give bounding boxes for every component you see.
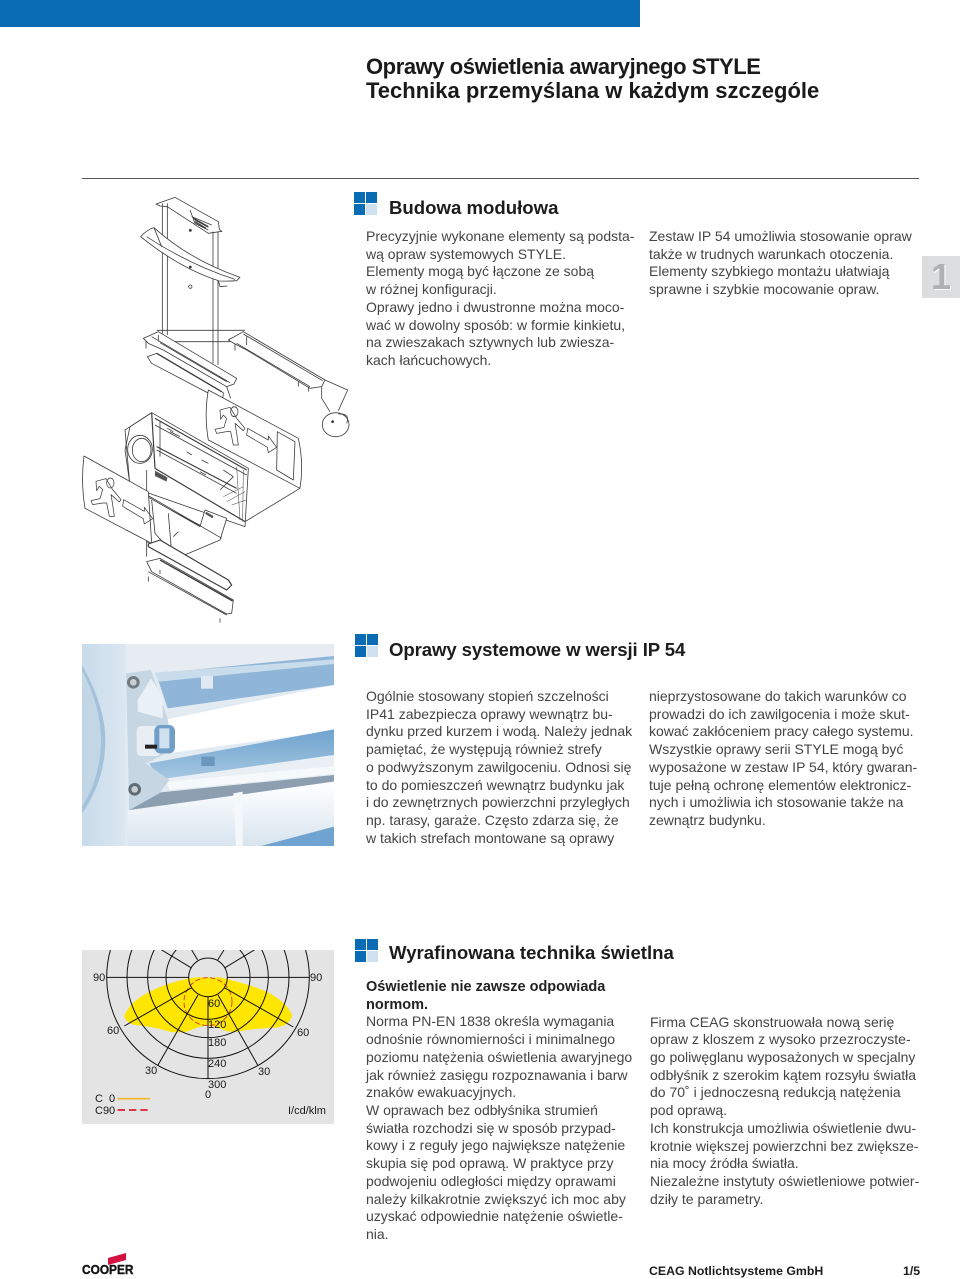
polar light distribution chart: 0: [205, 1089, 211, 1101]
text block: IP 54 right column: zewnątrz budynku.: [649, 812, 766, 828]
exploded drawing: luminaire module parts: [82, 196, 350, 623]
polar light distribution chart: 60: [107, 1025, 119, 1037]
text block: light technology right column: go poliwęglanu wyposażonych w specjalny: [650, 1049, 915, 1065]
polar light distribution chart: 30: [258, 1066, 270, 1078]
polar light distribution chart: 90: [310, 972, 322, 984]
polar light distribution chart: 90: [93, 972, 105, 984]
text block: IP 54 right column: [649, 688, 917, 828]
text block: Budowa modułowa left column: na zwieszakach sztywnych lub zwiesza-: [366, 334, 614, 350]
yellow C0 distribution: [124, 977, 292, 1032]
polar light distribution chart: 240: [208, 1058, 226, 1070]
text block: IP 54 left column: Ogólnie stosowany stopień szczelności: [366, 688, 609, 704]
text block: light technology right column: opraw z kloszem z wysoko przezroczyste-: [650, 1031, 911, 1047]
text block: IP 54 right column: Wszystkie oprawy serii STYLE mogą być: [649, 741, 903, 757]
polar light distribution chart: I/cd/klm: [288, 1105, 326, 1117]
polar light distribution chart: 30: [145, 1065, 157, 1077]
text block: Budowa modułowa left column: [366, 228, 634, 368]
text block: IP 54 left column: pamiętać, że występują również strefy: [366, 741, 602, 757]
text block: Budowa modułowa left column: kach łańcuchowych.: [366, 352, 491, 368]
text block: Budowa modułowa right column: także w trudnych warunkach otoczenia.: [649, 246, 893, 262]
title: [366, 54, 819, 103]
text block: light technology left column: poziomu natężenia oświetlenia awaryjnego: [366, 1049, 632, 1065]
text block: Budowa modułowa left column: wać w dowolny sposób: w formie kinkietu,: [366, 317, 625, 333]
polar light distribution chart: 60: [297, 1027, 309, 1039]
photo: luminaire interior: [82, 644, 334, 846]
text block: IP 54 right column: nych i umożliwia ich stosowanie także na: [649, 794, 903, 810]
text block: IP 54 left column: w takich strefach montowane są oprawy: [366, 830, 614, 846]
text block: light technology right column: odbłyśnik z szerokim kątem rozsyłu światła: [650, 1067, 916, 1083]
text block: light technology left column: [366, 979, 632, 1242]
text block: IP 54 right column: nieprzystosowane do takich warunków co: [649, 688, 907, 704]
heading icon: Wyrafinowana technika świetlna: [355, 939, 378, 962]
footer page number: 1/5: [903, 1264, 920, 1278]
C90 dashed distribution: [184, 978, 232, 1026]
text block: IP 54 right column: wyposażone w zestaw IP 54, który gwaran-: [649, 759, 917, 775]
text block: light technology left column: W oprawach bez odbłyśnika strumień: [366, 1102, 598, 1118]
text block: light technology left column: znaków ewakuacyjnych.: [366, 1084, 516, 1100]
chapter tab 1: 1: [931, 256, 951, 297]
text block: light technology left column: nia.: [366, 1226, 389, 1242]
polar light distribution chart: 180: [208, 1037, 226, 1049]
text block: light technology left column: podwojeniu odległości między oprawami: [366, 1173, 616, 1189]
text block: light technology left column: skupia się pod oprawą. W praktyce przy: [366, 1155, 613, 1171]
polar grid: [106, 950, 310, 1080]
text block: light technology left column: światła rozchodzi się w sposób przypad-: [366, 1120, 616, 1136]
text block: IP 54 left column: to do pomieszczeń wewnątrz budynku jak: [366, 777, 624, 793]
text block: light technology left column: jak również zasięgu rozpoznawania i barw: [366, 1067, 627, 1083]
text block: IP 54 left column: [366, 688, 632, 846]
text block: light technology left column: normom.: [366, 997, 428, 1013]
text block: light technology right column: nia mocy źródła światła.: [650, 1155, 799, 1171]
heading icon: Oprawy systemowe: [355, 634, 378, 657]
text block: light technology right column: do 70˚ i jednoczesną redukcją natężenia: [650, 1084, 901, 1100]
heading: Budowa modułowa: Budowa modułowa: [389, 197, 558, 218]
text block: light technology left column: odnośnie równomierności i minimalnego: [366, 1031, 615, 1047]
text block: Budowa modułowa left column: wą opraw systemowych STYLE.: [366, 246, 566, 262]
polar light distribution chart: [82, 950, 334, 1124]
text block: Budowa modułowa left column: Elementy mogą być łączone ze sobą: [366, 263, 594, 279]
polar light distribution chart: 60: [208, 998, 220, 1010]
text block: light technology right column: [650, 1014, 919, 1207]
chapter tab 1: [922, 256, 960, 298]
polar light distribution chart: 120: [208, 1019, 226, 1031]
text block: IP 54 left column: IP41 zabezpiecza oprawy wewnątrz bu-: [366, 706, 613, 722]
heading: Wyrafinowana technika świetlna: Wyrafinowana technika świetlna: [389, 942, 674, 963]
title rule: [82, 178, 919, 179]
text block: Budowa modułowa left column: Precyzyjnie wykonane elementy są podsta-: [366, 228, 634, 244]
heading icon: Budowa modułowa: [354, 192, 377, 215]
text block: light technology right column: pod oprawą.: [650, 1102, 727, 1118]
text block: light technology right column: dziły te parametry.: [650, 1191, 763, 1207]
polar light distribution chart: 300: [208, 1079, 226, 1091]
text block: light technology right column: Firma CEAG skonstruowała nową serię: [650, 1014, 894, 1030]
text block: IP 54 right column: kować zakłóceniem pracy całego systemu.: [649, 723, 914, 739]
text block: Budowa modułowa right column: Zestaw IP 54 umożliwia stosowanie opraw: [649, 228, 912, 244]
text block: light technology right column: krotnie większej powierzchni bez zwiększe-: [650, 1138, 918, 1154]
heading: Oprawy systemowe w wersji IP 54: Oprawy systemowe w wersji IP 54: [389, 639, 685, 660]
text block: light technology left column: Norma PN-EN 1838 określa wymagania: [366, 1013, 614, 1029]
text block: IP 54 left column: np. tarasy, garaże. Często zdarza się, że: [366, 812, 619, 828]
text block: light technology left column: Oświetlenie nie zawsze odpowiada: [366, 979, 605, 995]
text block: IP 54 left column: i do zewnętrznych powierzchni przyległych: [366, 794, 630, 810]
text block: light technology left column: kowy i z reguły jego największe natężenie: [366, 1137, 625, 1153]
text block: IP 54 right column: prowadzi do ich zawilgocenia i może skut-: [649, 706, 910, 722]
text block: Budowa modułowa right column: Elementy szybkiego montażu ułatwiają: [649, 263, 889, 279]
logo: Cooper: COOPER: [82, 1263, 133, 1277]
text block: Budowa modułowa left column: Oprawy jedno i dwustronne można moco-: [366, 299, 624, 315]
text block: IP 54 left column: o podwyższonym zawilgoceniu. Odnosi się: [366, 759, 631, 775]
text block: IP 54 right column: tuje pełną ochronę elementów elektronicz-: [649, 777, 911, 793]
title: Oprawy oświetlenia awaryjnego STYLE: [366, 54, 761, 79]
text block: light technology left column: uzyskać odpowiednie natężenie oświetle-: [366, 1208, 623, 1224]
polar light distribution chart: C90: [95, 1105, 115, 1117]
text block: light technology right column: Ich konstrukcja umożliwia oświetlenie dwu-: [650, 1120, 916, 1136]
text block: Budowa modułowa right column: sprawne i szybkie mocowanie opraw.: [649, 281, 879, 297]
logo: Cooper: [82, 1253, 134, 1277]
footer company name: CEAG Notlichtsysteme GmbH: [649, 1264, 823, 1278]
title: Technika przemyślana w każdym szczególe: [366, 78, 819, 103]
text block: light technology right column: Niezależne instytuty oświetleniowe potwier-: [650, 1173, 919, 1189]
text block: IP 54 left column: dynku przed kurzem i wodą. Należy jednak: [366, 723, 632, 739]
top blue bar: [0, 0, 640, 27]
text block: light technology left column: należy kilkakrotnie zwiększyć ich moc aby: [366, 1191, 626, 1207]
polar light distribution chart: C 0: [95, 1093, 115, 1105]
text block: Budowa modułowa right column: [649, 228, 912, 297]
text block: Budowa modułowa left column: w różnej konfiguracji.: [366, 281, 497, 297]
